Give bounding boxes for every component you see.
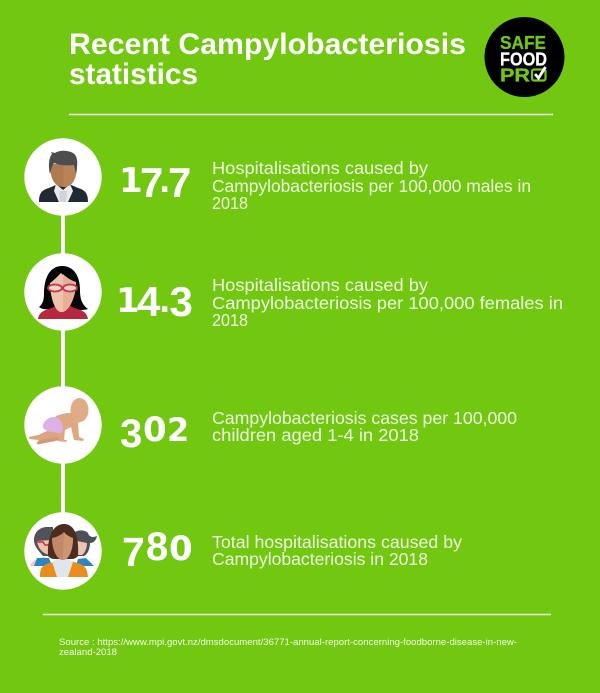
description <box>212 532 462 569</box>
description: 2018 <box>212 310 248 330</box>
icon: man <box>24 138 102 216</box>
stat: males <box>24 138 531 216</box>
logo: Safe Food Pro: SAFE <box>500 33 546 53</box>
description: children aged 1-4 in 2018 <box>212 425 419 445</box>
value: 3 <box>120 412 142 456</box>
value: 7 <box>168 159 191 206</box>
logo: Safe Food Pro: PR <box>500 66 530 86</box>
icon: group of people <box>24 512 102 590</box>
value: 8 <box>146 525 168 569</box>
logo: Safe Food Pro: FOOD <box>500 50 547 70</box>
description <box>212 408 517 445</box>
description: Campylobacteriosis in 2018 <box>212 549 428 569</box>
description: Campylobacteriosis per 100,000 males in <box>212 176 531 196</box>
value: . <box>159 285 170 320</box>
value: 1 <box>119 161 143 201</box>
icon: woman <box>24 253 102 331</box>
stat: children <box>24 386 517 464</box>
value: 7 <box>122 529 145 575</box>
description <box>212 275 563 330</box>
value: 7 <box>140 159 163 206</box>
stat: total <box>24 512 462 590</box>
description: Campylobacteriosis cases per 100,000 <box>212 408 517 428</box>
value: 1 <box>116 281 140 321</box>
description: Total hospitalisations caused by <box>212 532 462 552</box>
logo: Safe Food Pro <box>484 17 564 97</box>
source note: zealand-2018 <box>59 647 117 658</box>
description <box>212 158 531 213</box>
title <box>69 28 466 91</box>
description: Hospitalisations caused by <box>212 275 428 295</box>
value: 3 <box>170 278 193 325</box>
value: . <box>159 165 170 200</box>
description: 2018 <box>212 193 248 213</box>
title: Recent Campylobacteriosis <box>69 28 466 61</box>
value: 0 <box>169 529 193 569</box>
description: Hospitalisations caused by <box>212 158 428 178</box>
value: 2 <box>167 411 189 449</box>
source note: Source : https://www.mpi.govt.nz/dmsdocument/36771-annual-report-concerning-foodborne-disease-in-new- <box>59 637 517 648</box>
source note <box>59 637 517 658</box>
stat: females <box>24 253 563 331</box>
title: statistics <box>69 58 198 91</box>
description: Campylobacteriosis per 100,000 females in <box>212 293 563 313</box>
icon: baby <box>24 386 102 464</box>
value: 4 <box>137 278 161 325</box>
value: 0 <box>143 410 167 450</box>
